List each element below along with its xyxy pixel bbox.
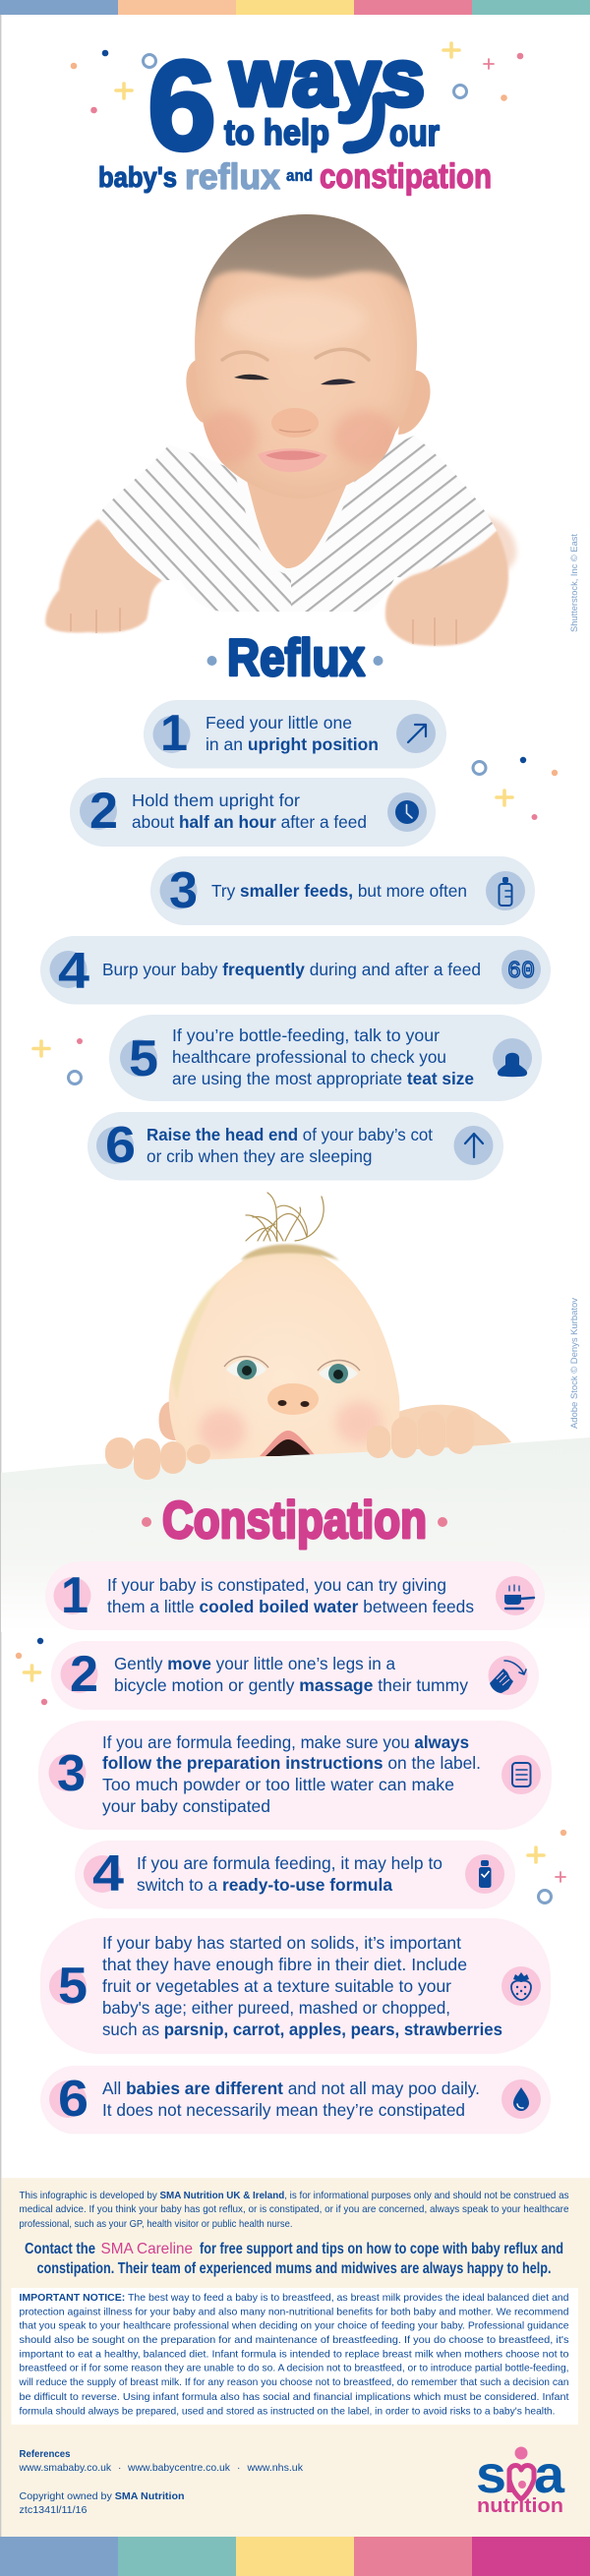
icon: instruction label — [502, 1755, 541, 1794]
icon: diagonal arrow — [396, 714, 436, 753]
text: Try smaller feeds, but more often — [211, 881, 467, 901]
important notice: IMPORTANT NOTICE: The best way to feed a baby is to breastfeed, as breast milk provides the ideal balanced diet and — [20, 2293, 569, 2304]
title — [71, 33, 523, 197]
title: constipation — [320, 157, 492, 196]
number 2: 2 — [70, 1646, 98, 1703]
panel: constipation step 5: baby's age; either pureed, mashed or chopped, — [102, 1998, 450, 2018]
ears — [186, 359, 431, 435]
references: · — [237, 2463, 240, 2474]
text: If you’re bottle-feeding, talk to your — [172, 1025, 440, 1045]
left arm — [45, 519, 162, 633]
blanket — [1, 1437, 590, 1632]
references: www.smababy.co.uk — [18, 2463, 112, 2474]
panel: reflux step 1: in an upright position — [206, 734, 379, 754]
right arm — [385, 531, 508, 646]
title: and — [286, 166, 313, 185]
important notice: formula should always be prepared, used and stored as instructed on the label, in order to avoid risks to a baby's health. — [20, 2406, 555, 2417]
panel: reflux step 3 — [150, 856, 535, 925]
mouth — [260, 1431, 316, 1456]
panel: reflux step 6: or crib when they are sleeping — [147, 1146, 372, 1166]
careline callout: SMA Careline — [100, 2241, 193, 2257]
hair base — [241, 1244, 339, 1260]
title: ways — [229, 33, 425, 123]
important notice: that you speak to your healthcare professional when deciding on your choice of feeding your baby. Professional guidance — [20, 2321, 569, 2332]
number 6: 6 — [58, 2071, 88, 2128]
important notice: should also be sought on the preparation for and maintenance of breastfeeding. If you do choose to breastfeed, it's — [20, 2335, 568, 2346]
nose — [271, 408, 319, 438]
reflux confetti right — [473, 757, 558, 820]
important notice: important to eat a healthy, balanced diet. Infant formula is intended to replace breast milk when mothers choose not to — [20, 2349, 569, 2360]
left fingers — [105, 1437, 210, 1480]
number 2: 2 — [89, 783, 118, 840]
bottom colour bar — [0, 2537, 590, 2576]
important notice: will reduce the supply of breast milk. If for any reason you choose not to breastfeed, do remember that such a decision can — [18, 2377, 568, 2388]
panel: constipation step 5: that they have enough fibre in their diet. Include — [102, 1955, 467, 1974]
photo: smiling baby in striped top — [45, 206, 516, 646]
head — [169, 1247, 399, 1465]
logo: SMA Nutrition: nutrition — [477, 2495, 563, 2517]
important notice: protection against illness for your baby and also many non-nutritional benefits for both baby and mother. We recommend — [20, 2307, 569, 2318]
title confetti — [71, 43, 523, 113]
panel: constipation step 4 — [75, 1841, 515, 1909]
collar and neck — [234, 464, 362, 574]
copyright: Copyright owned by SMA Nutrition — [20, 2491, 185, 2502]
photo credit: Adobe Stock: Adobe Stock © Denys Kurbatov — [569, 1298, 580, 1429]
panel: constipation step 3: follow the preparation instructions on the label. — [102, 1753, 481, 1773]
number 3: 3 — [57, 1745, 86, 1802]
icon: ready-to-use bottle — [465, 1854, 504, 1894]
number 5: 5 — [129, 1030, 158, 1087]
references — [18, 2449, 304, 2474]
icon: pan with steam — [496, 1576, 535, 1615]
panel: reflux step 1 — [144, 700, 446, 769]
number 3: 3 — [169, 862, 198, 919]
disclaimer: professional, such as your GP, health visitor or public health nurse. — [20, 2219, 293, 2230]
hair — [192, 206, 423, 465]
panel: reflux step 2: about half an hour after a feed — [132, 812, 367, 832]
right arm behind fingers — [393, 1405, 511, 1457]
copyright: ztc1341l/11/16 — [20, 2505, 88, 2516]
eyebrows — [222, 349, 369, 360]
panel: constipation step 3 — [38, 1721, 552, 1830]
title: baby's — [98, 162, 177, 194]
reflux confetti left — [33, 1038, 83, 1083]
title: our — [389, 113, 440, 154]
t-shirt — [99, 436, 497, 612]
panel: reflux step 2 — [70, 778, 436, 847]
heading: Reflux: Reflux — [227, 629, 365, 687]
number 6: 6 — [105, 1117, 136, 1174]
panel: constipation step 6: It does not necessarily mean they’re constipated — [102, 2100, 465, 2120]
panel: constipation step 5: such as parsnip, carrot, apples, pears, strawberries — [102, 2020, 502, 2039]
panel: reflux step 6 — [88, 1112, 503, 1180]
eyes — [234, 375, 356, 384]
constipation confetti left — [16, 1638, 47, 1705]
text: If you are formula feeding, it may help to — [137, 1853, 442, 1873]
number 1: 1 — [61, 1567, 88, 1624]
text: If you are formula feeding, make sure you always — [102, 1732, 469, 1752]
panel: constipation step 6 — [40, 2066, 551, 2134]
text: Hold them upright for — [132, 790, 300, 810]
head — [195, 214, 417, 498]
panel: constipation step 5 — [40, 1918, 551, 2054]
disclaimer: medical advice. If you think your baby has got reflux, or is constipated, or if you are concerned, always speak to your healthcare — [20, 2204, 569, 2215]
panel: constipation step 1: them a little cooled boiled water between feeds — [107, 1597, 474, 1616]
text: If your baby is constipated, you can try giving — [107, 1575, 446, 1595]
icon: massaging hand — [488, 1656, 527, 1695]
panel: constipation step 2: bicycle motion or gently massage their tummy — [114, 1675, 468, 1695]
panel: constipation step 3: Too much powder or too little water can make — [102, 1775, 454, 1794]
icon: sixty seconds display: 60 — [507, 959, 535, 985]
text: All babies are different and not all may poo daily. — [102, 2078, 480, 2098]
panel: reflux step 5 — [109, 1015, 542, 1101]
constipation confetti right — [528, 1830, 566, 1903]
important notice: be difficult to reverse. Using infant formula also has social and financial implications which must be considered. Infant — [20, 2392, 569, 2403]
title: 6 — [148, 33, 216, 177]
hair strands — [246, 1193, 324, 1242]
icon: up arrow — [454, 1126, 494, 1165]
panel: constipation step 2 — [51, 1641, 539, 1710]
logo: SMA Nutrition — [476, 2445, 565, 2517]
text: Gently move your little one’s legs in a — [114, 1654, 395, 1673]
careline callout — [25, 2241, 563, 2277]
mouth — [258, 448, 327, 472]
disclaimer: This infographic is developed by SMA Nutrition UK & Ireland, is for informational purposes only and should not be construed as — [20, 2191, 568, 2201]
icon: baby bottle — [486, 871, 525, 910]
copyright — [20, 2491, 185, 2516]
top colour bar — [0, 0, 590, 15]
careline callout: Contact the — [25, 2241, 95, 2257]
number 4: 4 — [92, 1845, 124, 1903]
eyes — [224, 1357, 360, 1383]
number 5: 5 — [58, 1958, 88, 2015]
icon: clock — [387, 792, 427, 832]
text: Raise the head end of your baby’s cot — [147, 1125, 433, 1144]
icon: bottle teat — [493, 1038, 532, 1078]
ear — [159, 1401, 179, 1440]
icon: sixty seconds display — [502, 950, 541, 989]
logo: SMA Nutrition: s — [476, 2445, 506, 2504]
nose — [267, 1383, 319, 1415]
references: www.babycentre.co.uk — [127, 2463, 231, 2474]
right fingers — [367, 1409, 474, 1458]
references: · — [118, 2463, 121, 2474]
important notice — [12, 2288, 578, 2425]
references: References — [20, 2449, 71, 2460]
cheeks — [199, 1401, 383, 1452]
panel: constipation step 4: switch to a ready-to-use formula — [137, 1875, 392, 1895]
important notice: breastfeed or if for some reason they are unable to do so. A decision not to breastfeed, or to introduce partial bottle-feeding, — [20, 2364, 568, 2374]
panel: reflux step 5: healthcare professional to check you — [172, 1047, 446, 1067]
text: If your baby has started on solids, it’s important — [102, 1933, 461, 1953]
references: www.nhs.uk — [246, 2463, 304, 2474]
logo: SMA Nutrition: a — [534, 2445, 565, 2504]
panel: constipation step 1 — [45, 1561, 545, 1630]
number 4: 4 — [58, 943, 89, 1000]
heading: Constipation: Constipation — [162, 1492, 427, 1550]
photo credit: Shutterstock: Shutterstock, Inc © East — [569, 534, 580, 632]
icon: strawberry — [502, 1966, 541, 2006]
panel: reflux step 4 — [40, 936, 551, 1005]
title: reflux — [185, 156, 280, 197]
panel: reflux step 5: are using the most appropriate teat size — [172, 1069, 474, 1088]
hand finger creases — [71, 608, 456, 646]
number 1: 1 — [160, 705, 188, 762]
title: to help — [224, 112, 329, 152]
panel: constipation step 5: fruit or vegetables at a texture suitable to your — [102, 1976, 451, 1996]
disclaimer — [20, 2191, 569, 2230]
icon: water drop — [502, 2079, 541, 2119]
panel: footer — [1, 2178, 590, 2537]
text: Feed your little one — [206, 713, 352, 732]
text: Burp your baby frequently during and after a feed — [102, 960, 481, 979]
photo: baby peeking over blanket — [1, 1193, 590, 1632]
panel: constipation step 3: your baby constipated — [102, 1796, 270, 1816]
